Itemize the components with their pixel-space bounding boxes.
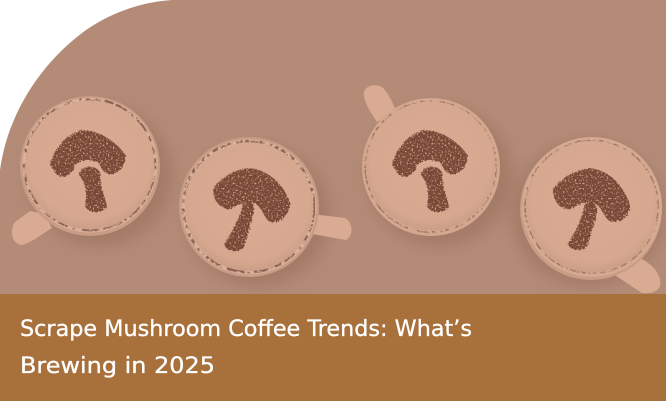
cup 2 [179, 137, 352, 286]
cup 4 [512, 137, 664, 293]
handle [616, 258, 660, 293]
title: Brewing in 2025 [20, 353, 215, 379]
mushroom [392, 130, 468, 212]
cup 3 [362, 85, 512, 246]
cup 1 [12, 96, 172, 246]
handle [364, 85, 396, 122]
mushroom [213, 168, 290, 251]
mushroom [50, 130, 126, 212]
mushroom [553, 168, 630, 250]
title band [0, 294, 666, 401]
title: Scrape Mushroom Coffee Trends: What’s [20, 316, 472, 342]
handle [312, 214, 352, 240]
handle [12, 211, 52, 245]
photo panel with rounded top-left corner [0, 0, 666, 294]
